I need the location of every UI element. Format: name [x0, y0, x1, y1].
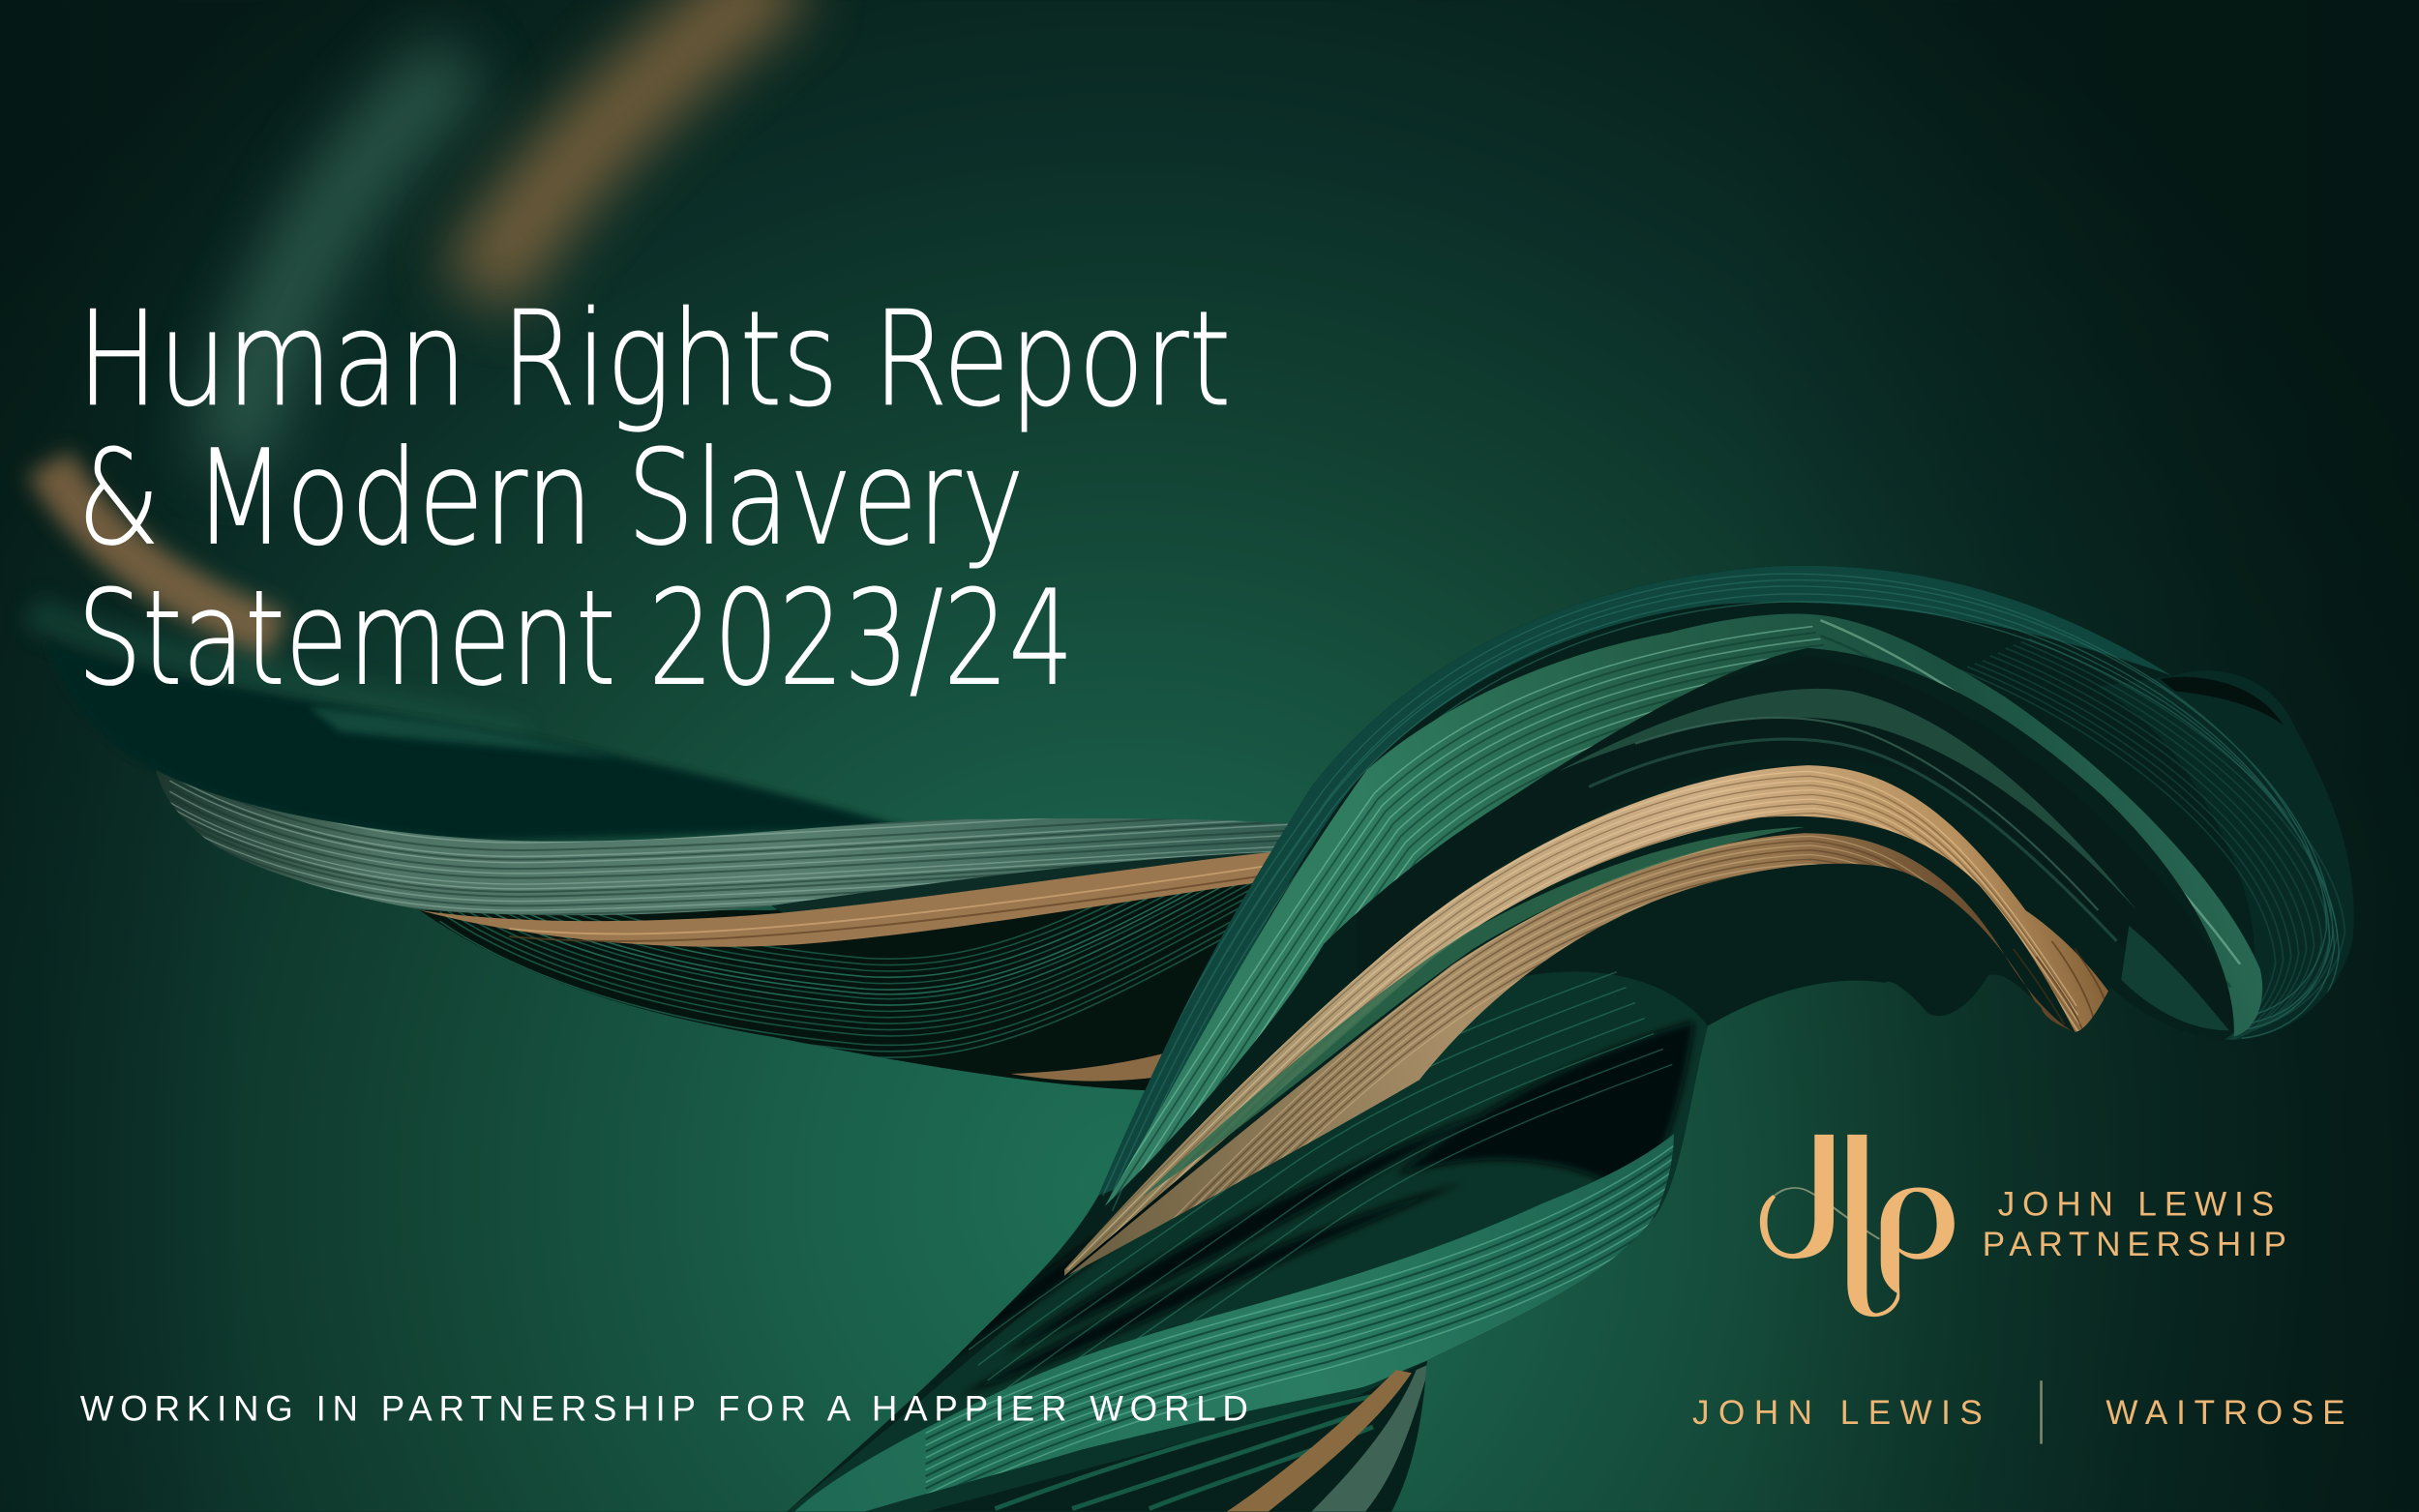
- logo: JLP monogram: [1760, 1135, 1955, 1317]
- lower dark green field: [787, 971, 1708, 1512]
- title: [77, 282, 1231, 715]
- title: Human Rights Report: [77, 282, 1231, 435]
- lower black stripes: [911, 1022, 1694, 1396]
- grey green band: [156, 770, 1308, 915]
- dark gap above gold: [771, 851, 1288, 926]
- title: & Modern Slavery: [77, 421, 1025, 574]
- silhouette: [787, 566, 2354, 1512]
- logo wordmark: JOHN LEWIS: [1998, 1186, 2274, 1224]
- blurred background strands: [31, 0, 787, 741]
- rear gold strand: [1227, 1370, 1412, 1512]
- lower stripes below bright band: [995, 1396, 1373, 1509]
- gold strand: [420, 850, 1290, 947]
- dark upper band: [46, 640, 911, 841]
- gold band upper: [1064, 765, 2117, 1276]
- right curl: [2098, 670, 2354, 1040]
- strapline: WORKING IN PARTNERSHIP FOR A HAPPIER WORLD: [80, 1389, 1248, 1429]
- logo wordmark: PARTNERSHIP: [1983, 1226, 2286, 1263]
- green stripe in gold: [1142, 827, 1805, 1197]
- light green band: [1105, 614, 2262, 1206]
- brand names: [1692, 1394, 2344, 1432]
- big twisted ribbon: [787, 566, 2354, 1512]
- bright green band: [794, 1134, 1674, 1512]
- brand divider: [2040, 1380, 2043, 1444]
- gold band lower: [1067, 833, 2075, 1276]
- brand names: JOHN LEWIS: [1692, 1394, 1983, 1432]
- title: Statement 2023/24: [77, 562, 1074, 715]
- brand names: WAITROSE: [2105, 1394, 2344, 1432]
- dark arch interior: [1358, 656, 2234, 1030]
- dark lower band: [420, 864, 1303, 1090]
- gold right end fibres: [2014, 941, 2107, 1030]
- small gold strand: [1010, 1049, 1180, 1082]
- logo wordmark: [1983, 1186, 2286, 1263]
- rear grey strand: [1311, 1364, 1430, 1512]
- left ribbon strand: [46, 640, 1308, 1090]
- teal outer band: [1098, 566, 2172, 1196]
